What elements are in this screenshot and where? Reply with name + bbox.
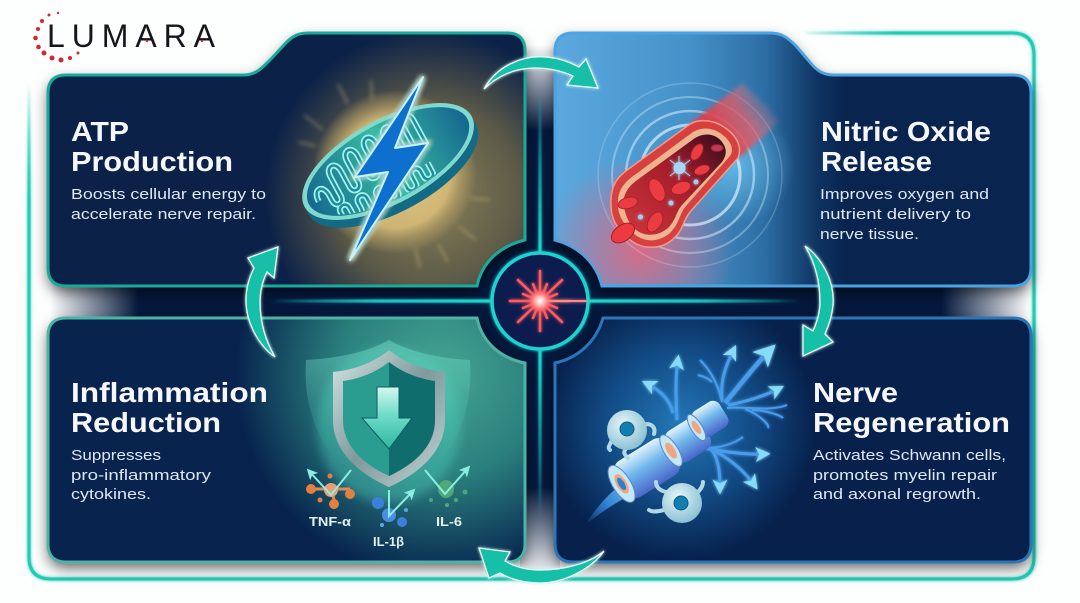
heading: Inflammation (71, 377, 268, 408)
icon: nitric oxide molecule (638, 156, 698, 220)
description: accelerate nerve repair. (71, 206, 256, 223)
panel: Nitric Oxide release (555, 33, 1031, 286)
logo wordmark: LUMARA (47, 18, 216, 54)
heading: Release (821, 146, 932, 177)
description: pro-inflammatory (71, 467, 212, 484)
description: Suppresses (71, 447, 161, 464)
heading: Production (71, 146, 233, 177)
description: promotes myelin repair (813, 467, 997, 484)
icon: loose red blood cell (608, 219, 638, 247)
panel: Nerve regeneration (555, 318, 1031, 562)
heading: ATP (71, 116, 129, 147)
arrow: inflammation reduction to ATP (246, 247, 278, 357)
heading: Regeneration (813, 407, 1010, 438)
description: cytokines. (71, 486, 151, 503)
arrow: ATP to nitric oxide (484, 57, 598, 89)
description: Activates Schwann cells, (813, 447, 1006, 464)
heading: Nerve (813, 377, 898, 408)
icon: laser starburst (510, 271, 586, 331)
icon: Schwann cell upper (607, 410, 654, 458)
description: and axonal regrowth. (813, 486, 981, 503)
panel: Inflammation reduction (48, 318, 525, 562)
cytokine: TNF-α (306, 470, 355, 529)
icon: regenerating nerve (585, 349, 787, 525)
icon: blood vessel with nitric oxide waves (598, 83, 782, 267)
cytokine: IL-1β (372, 490, 413, 549)
icon: Schwann cell lower (649, 482, 703, 523)
heading: Reduction (71, 407, 221, 438)
description: nutrient delivery to (820, 206, 971, 223)
connector lines (270, 90, 800, 520)
arrow: nerve regeneration to inflammation reduction (479, 548, 604, 583)
cytokine: IL-1β: IL-1β (373, 535, 404, 549)
logo dots (33, 12, 203, 63)
center laser hub (270, 90, 800, 520)
cytokine: TNF-α: TNF-α (309, 515, 351, 529)
logo: Lumara (33, 12, 216, 63)
heading: Nitric Oxide (821, 116, 991, 147)
icon: mitochondrion with lightning bolt (285, 77, 496, 268)
cytokine: IL-6: IL-6 (436, 515, 462, 529)
description: nerve tissue. (820, 226, 919, 243)
description: Improves oxygen and (820, 186, 989, 203)
icon: shield with down arrow (306, 340, 470, 503)
arrow: nitric oxide to nerve regeneration (803, 246, 833, 356)
cytokine: IL-6 (425, 468, 468, 529)
panel: ATP production (48, 33, 525, 286)
description: Boosts cellular energy to (71, 186, 266, 203)
